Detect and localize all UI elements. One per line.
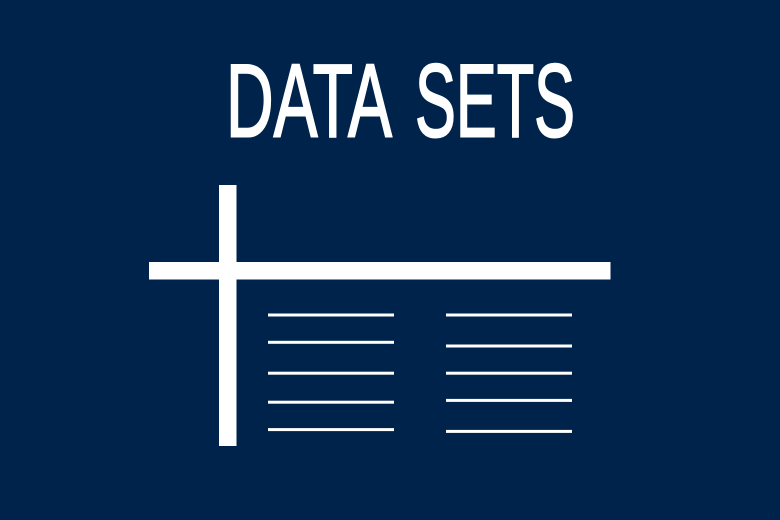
right column rows	[446, 314, 572, 433]
title: SETS	[415, 44, 575, 160]
table column rule	[219, 185, 236, 446]
left column rows	[268, 314, 394, 431]
table header rule	[149, 262, 610, 280]
icon: data table	[149, 185, 610, 446]
title: DATA	[226, 44, 392, 160]
